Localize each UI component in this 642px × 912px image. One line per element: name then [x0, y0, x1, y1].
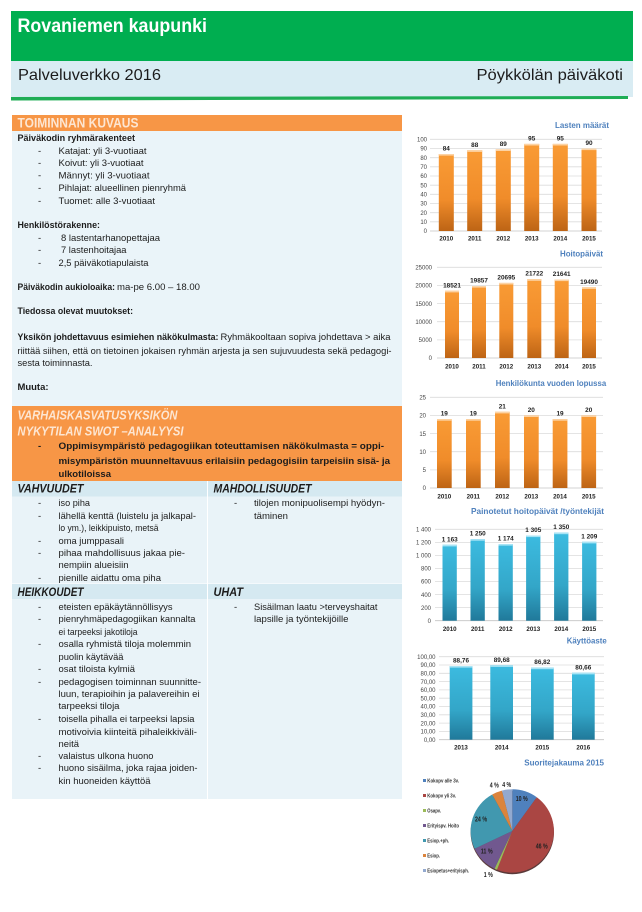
text block: staff structure: -	[38, 233, 41, 244]
legend: Esiop.	[427, 854, 440, 860]
bar chart: käyttöaste: 2016	[576, 744, 591, 752]
bar chart: henkilökunta: 2012	[495, 494, 510, 500]
bar chart: lasten määrät: 95	[528, 135, 536, 142]
bar chart: lasten määrät: 2014	[553, 236, 568, 242]
text block: group structure: -	[38, 146, 41, 157]
bar chart: käyttöaste: 2014	[495, 744, 509, 752]
bar chart: lasten määrät: 70	[420, 165, 428, 171]
list: strengths	[38, 498, 196, 584]
bar chart: henkilökunta: 19	[441, 411, 448, 418]
bar chart: painotetut hoitopäivät: 1 209	[581, 533, 598, 540]
text block: group structure: Katajat: yli 3-vuotiaat	[58, 146, 147, 157]
legend: Esiop.+ph.	[427, 839, 449, 845]
pie value labels	[475, 782, 548, 879]
text block: group structure: Tuomet: alle 3-vuotiaat	[58, 196, 155, 207]
bar chart: käyttöaste: 80,00	[420, 672, 436, 678]
heading: swot line 2: NYKYTILAN SWOT –ANALYYSI	[18, 424, 184, 438]
list: weaknesses: -	[38, 677, 41, 688]
list: strengths: pihaa mahdollisuus jakaa pie-	[58, 548, 185, 559]
text block: staff structure: -	[38, 245, 41, 256]
pie value labels: 4 %	[490, 782, 499, 790]
bar chart: henkilökunta: 2010	[437, 494, 452, 500]
list: weaknesses: puolin käytävää	[58, 652, 124, 663]
bar chart: lasten määrät: 2012	[496, 236, 511, 242]
chart title: Käyttöaste	[567, 636, 607, 646]
bar chart: lasten määrät: 2010	[439, 236, 454, 242]
text block: manageability: riittää siihen, että on tietoinen jokaisen ryhmän arjesta ja sen sujuvuudesta sekä pedagogi-	[18, 346, 392, 357]
text block: staff structure: 2,5 päiväkotiapulaista	[58, 258, 149, 269]
legend: Erityispv. Hoito	[427, 824, 460, 830]
bar chart: käyttöaste: 60,00	[420, 688, 436, 694]
bar chart: painotetut hoitopäivät: 0	[428, 619, 432, 625]
list: threats	[234, 602, 378, 625]
pie value labels: 46 %	[536, 844, 548, 850]
bar chart: käyttöaste: 89,68	[494, 657, 510, 664]
text block: group structure: Koivut: yli 3-vuotiaat	[58, 158, 144, 169]
list: weaknesses: -	[38, 751, 41, 762]
bar chart: hoitopäivät: 2012	[499, 364, 514, 370]
bar chart: hoitopäivät: 2011	[472, 364, 486, 370]
bar chart: käyttöaste: 70,00	[420, 680, 436, 686]
legend	[423, 779, 469, 875]
list: weaknesses: -	[38, 639, 41, 650]
text block: group structure: -	[38, 196, 41, 207]
list: weaknesses: kin huoneiden käyttöä	[58, 776, 151, 787]
bar chart: henkilökunta: 10	[419, 450, 427, 456]
bar chart: painotetut hoitopäivät: 1 350	[553, 524, 570, 531]
bar chart: käyttöaste	[417, 636, 607, 752]
bar chart: lasten määrät: 2011	[468, 236, 482, 242]
bar chart: henkilökunta: 20	[528, 407, 535, 414]
panel: uhat	[208, 584, 402, 799]
text block: learning environment: Oppimisympäristö pedagogiikan toteuttamisen näkökulmasta = oppi-	[58, 441, 384, 452]
bar chart: lasten määrät: 20	[420, 211, 428, 217]
title: organisation: Rovaniemen kaupunki	[18, 16, 207, 37]
bar chart: käyttöaste: 10,00	[420, 730, 436, 736]
bar chart: lasten määrät: 2013	[525, 236, 539, 242]
bar chart: henkilökunta: 20	[419, 414, 427, 420]
text block: group structure: Päiväkodin ryhmärakenteet	[18, 133, 136, 144]
subtitle: unit name: Pöykkölän päiväkoti	[476, 67, 623, 84]
bar chart: henkilökunta: 25	[419, 396, 427, 402]
text block: learning environment: -	[38, 441, 41, 452]
pie value labels: 24 %	[475, 816, 488, 824]
bar chart: painotetut hoitopäivät: 2012	[499, 626, 513, 633]
bar chart: painotetut hoitopäivät: 800	[421, 567, 432, 573]
text block: group structure: -	[38, 170, 41, 182]
bar chart: käyttöaste: 86,82	[534, 659, 551, 666]
text block: staff structure: 7 lastenhoitajaa	[61, 245, 127, 256]
list: strengths: lähellä kenttä (luistelu ja jalkapal-	[58, 511, 196, 522]
heading: mahdollisuudet: MAHDOLLISUUDET	[214, 484, 312, 496]
subtitle: service network: Palveluverkko 2016	[18, 67, 161, 84]
panel: vahvuudet	[12, 481, 207, 584]
bar chart: painotetut hoitopäivät: 600	[421, 580, 432, 586]
bar chart: painotetut hoitopäivät: 1 000	[416, 554, 432, 560]
chart title: Hoitopäivät	[560, 249, 603, 259]
bar chart: painotetut hoitopäivät: 2014	[554, 626, 569, 633]
text block: group structure	[18, 133, 187, 207]
list: weaknesses	[38, 602, 201, 787]
bar chart: henkilökunta: 2011	[467, 494, 481, 500]
bar chart: painotetut hoitopäivät: 1 200	[416, 541, 432, 547]
bar chart: hoitopäivät: 10000	[415, 320, 433, 326]
legend: Esiopetus+erityisph.	[427, 869, 469, 875]
bar chart: lasten määrät: 60	[420, 174, 428, 180]
text block: manageability: sesta toiminnasta.	[18, 358, 92, 369]
bar chart: painotetut hoitopäivät: 2013	[526, 626, 541, 633]
bar chart: lasten määrät: 30	[420, 202, 428, 208]
legend: Kokopv alle 3v.	[427, 779, 459, 785]
pie value labels: 11 %	[481, 848, 493, 856]
bar chart: hoitopäivät: 20000	[415, 284, 433, 290]
bar chart: hoitopäivät: 2010	[445, 364, 459, 370]
list: threats: Sisäilman laatu >terveyshaitat	[254, 602, 378, 613]
legend: Kokopv yli 3v.	[427, 794, 456, 800]
bar chart: henkilökunta: 21	[499, 403, 506, 410]
bar chart: lasten määrät: 89	[500, 141, 507, 148]
text block: other: Muuta:	[18, 382, 48, 393]
chart title: Henkilökunta vuoden lopussa	[496, 378, 606, 388]
pie slices	[471, 789, 554, 874]
bar chart: lasten määrät: 10	[420, 220, 428, 226]
pie value labels: 4 %	[502, 782, 512, 789]
pie value labels: 10 %	[516, 796, 528, 803]
bar chart: hoitopäivät: 2014	[555, 364, 569, 370]
list: strengths: oma jumppasali	[58, 536, 124, 547]
list: weaknesses: eteisten epäkäytännöllisyys	[58, 602, 173, 613]
pie chart: suoritejakauma	[423, 758, 604, 879]
text block: staff structure: -	[38, 258, 41, 269]
bar chart: henkilökunta: 2013	[524, 494, 539, 500]
legend: Osapv.	[427, 809, 441, 815]
bar chart: käyttöaste: 50,00	[420, 696, 436, 702]
list: strengths: -	[38, 498, 41, 509]
bar chart: lasten määrät: 2015	[582, 236, 596, 242]
list: strengths: iso piha	[58, 498, 91, 509]
list: strengths: -	[38, 511, 41, 522]
bar chart: painotetut hoitopäivät: 2015	[582, 626, 597, 633]
list: opportunities: -	[234, 498, 237, 509]
bar chart: hoitopäivät: 21641	[553, 271, 571, 278]
chart title: Suoritejakauma 2015	[524, 758, 604, 768]
text block: staff structure: Henkilöstörakenne:	[18, 220, 100, 231]
bar chart: käyttöaste: 40,00	[420, 705, 436, 711]
bar chart: painotetut hoitopäivät: 1 163	[442, 536, 458, 543]
bar chart: lasten määrät: 0	[424, 229, 428, 235]
heading: heikkoudet: HEIKKOUDET	[18, 587, 84, 599]
list: weaknesses: valaistus ulkona huono	[58, 751, 154, 762]
bar chart: painotetut hoitopäivät: 2010	[443, 626, 457, 633]
list: weaknesses: osalla ryhmistä tiloja molemmin	[58, 639, 191, 650]
text block: opening hours: Päiväkodin aukioloaika:	[18, 282, 115, 293]
bar chart: lasten määrät: 100	[417, 138, 428, 144]
bar chart: lasten määrät: 40	[420, 192, 428, 198]
text block: known changes: Tiedossa olevat muutokset:	[18, 306, 133, 317]
bar chart: henkilökunta: 2014	[553, 494, 567, 500]
bar chart: hoitopäivät: 20695	[497, 274, 516, 281]
list: threats: lapsille ja työntekijöille	[254, 614, 348, 625]
list: opportunities: täminen	[254, 511, 288, 522]
chart title: Painotetut hoitopäivät /työntekijät	[471, 506, 604, 516]
heading: uhat: UHAT	[214, 587, 244, 599]
panel: heikkoudet	[12, 584, 207, 799]
list: weaknesses: pienryhmäpedagogiikan kannalta	[58, 614, 196, 625]
bar chart: hoitopäivät	[415, 249, 603, 370]
bar chart: henkilökunta: 0	[423, 486, 427, 492]
bar chart: painotetut hoitopäivät: 400	[421, 593, 432, 599]
text block: group structure: Männyt: yli 3-vuotiaat	[58, 170, 150, 182]
text block: manageability	[18, 332, 392, 369]
list: weaknesses: huono sisäilma, joka rajaa joiden-	[58, 763, 198, 774]
bar chart: käyttöaste: 88,76	[453, 658, 469, 664]
bar chart: henkilökunta: 5	[423, 468, 427, 474]
list: weaknesses: -	[38, 664, 41, 675]
bar chart: käyttöaste: 0,00	[424, 738, 436, 744]
bar chart: hoitopäivät: 15000	[415, 302, 433, 308]
list: opportunities: tilojen monipuolisempi hyödyn-	[254, 498, 385, 509]
text block: opening hours: ma-pe 6.00 – 18.00	[117, 282, 200, 293]
bar chart: henkilökunta: 19	[556, 411, 564, 418]
bar chart: hoitopäivät: 19490	[580, 279, 598, 286]
bar chart: hoitopäivät: 21722	[525, 271, 544, 278]
chart title: Lasten määrät	[555, 120, 609, 130]
bar chart: painotetut hoitopäivät: 1 400	[416, 528, 432, 534]
heading: vahvuudet: VAHVUUDET	[18, 484, 84, 496]
list: weaknesses: -	[38, 714, 41, 725]
list: threats: -	[234, 602, 237, 613]
pie value labels: 1 %	[484, 872, 493, 879]
list: weaknesses: luun, terapioihin ja palavereihin ei	[58, 689, 200, 700]
panel: toiminnan kuvaus	[12, 115, 402, 406]
bar chart: henkilökunta: 2015	[582, 494, 596, 500]
bar chart: hoitopäivät: 25000	[415, 266, 433, 272]
list: strengths: nempiin alueisiin	[58, 560, 128, 571]
bar chart: käyttöaste: 2015	[535, 744, 550, 752]
list: weaknesses: tarpeeksi tiloja	[58, 701, 120, 712]
bar chart: lasten määrät	[417, 120, 609, 242]
bar chart: lasten määrät: 88	[471, 142, 479, 149]
bar chart: henkilökunta: 15	[419, 432, 427, 438]
header banner	[11, 11, 633, 100]
bar chart: painotetut hoitopäivät: 1 250	[470, 531, 486, 538]
text block: staff structure	[18, 220, 161, 269]
heading: swot line 1: VARHAISKASVATUSYKSIKÖN	[18, 408, 178, 422]
bar chart: lasten määrät: 90	[585, 140, 593, 147]
bar chart: käyttöaste: 90,00	[420, 663, 436, 669]
bar chart: lasten määrät: 80	[420, 156, 428, 162]
list: strengths: -	[38, 548, 41, 559]
text block: group structure: -	[38, 158, 41, 169]
list: strengths: -	[38, 536, 41, 547]
bar chart: käyttöaste: 30,00	[420, 713, 436, 719]
text block: opening hours	[18, 282, 200, 293]
list: weaknesses: ei tarpeeksi jakotiloja	[58, 627, 138, 638]
bar chart: hoitopäivät: 2013	[527, 364, 542, 370]
list: weaknesses: pedagogisen toiminnan suunnitte-	[58, 677, 201, 688]
bar chart: painotetut hoitopäivät: 1 305	[525, 527, 542, 534]
list: weaknesses: -	[38, 602, 41, 613]
text block: manageability: Ryhmäkooltaan sopiva johdettava > aika	[220, 332, 391, 343]
list: weaknesses: osat tiloista kylmiä	[58, 664, 136, 675]
list: weaknesses: -	[38, 763, 41, 774]
bar chart: käyttöaste: 100,00	[417, 655, 436, 661]
list: weaknesses: toisella pihalla ei tarpeeksi lapsia	[58, 714, 195, 725]
text block: group structure: Pihlajat: alueellinen pienryhmä	[58, 183, 187, 194]
bar chart: painotetut hoitopäivät: 2011	[471, 626, 485, 633]
bar chart: henkilökunta	[419, 378, 606, 500]
bar chart: käyttöaste: 2013	[454, 744, 468, 752]
bar chart: hoitopäivät: 18521	[443, 282, 461, 289]
bar chart: hoitopäivät: 5000	[419, 338, 433, 344]
bar chart: hoitopäivät: 19857	[470, 278, 488, 284]
bar chart: hoitopäivät: 0	[429, 356, 433, 362]
bar chart: hoitopäivät: 2015	[582, 364, 596, 370]
list: weaknesses: -	[38, 614, 41, 625]
text block: learning environment: ulkotiloissa	[58, 469, 112, 480]
text block: group structure: -	[38, 183, 41, 194]
text block: staff structure: 8 lastentarhanopettajaa	[61, 233, 161, 244]
list: strengths: lo ym.), leikkipuisto, metsä	[58, 523, 159, 534]
bar chart: lasten määrät: 50	[420, 183, 428, 189]
bar chart: henkilökunta: 19	[470, 411, 477, 418]
panel: mahdollisuudet	[208, 481, 402, 584]
bar chart: henkilökunta: 20	[585, 407, 593, 414]
bar chart: painotetut hoitopäivät: 1 174	[498, 536, 514, 542]
list: strengths: -	[38, 573, 41, 584]
text block: manageability: Yksikön johdettavuus esimiehen näkökulmasta:	[18, 332, 218, 343]
panel: swot heading	[12, 406, 402, 481]
list: weaknesses: motivoivia kiinteitä pihaleikkiväli-	[58, 727, 197, 738]
list: strengths: pienille aidattu oma piha	[58, 573, 162, 584]
bar chart: käyttöaste: 80,66	[575, 664, 592, 671]
bar chart: painotetut hoitopäivät: 200	[421, 606, 432, 612]
text block: learning environment: misympäristön muunneltavuus erilaisiin pedagogisiin tarpeisiin sisä- ja	[58, 456, 391, 467]
bar chart: käyttöaste: 20,00	[420, 721, 436, 727]
list: opportunities	[234, 498, 385, 522]
list: weaknesses: neitä	[58, 739, 80, 750]
bar chart: lasten määrät: 90	[420, 147, 428, 153]
bar chart: painotetut hoitopäivät	[416, 506, 604, 633]
text block: learning environment	[38, 441, 391, 480]
bar chart: lasten määrät: 84	[443, 146, 450, 152]
heading: toiminnan kuvaus: TOIMINNAN KUVAUS	[18, 116, 138, 130]
bar chart: lasten määrät: 95	[557, 135, 564, 142]
